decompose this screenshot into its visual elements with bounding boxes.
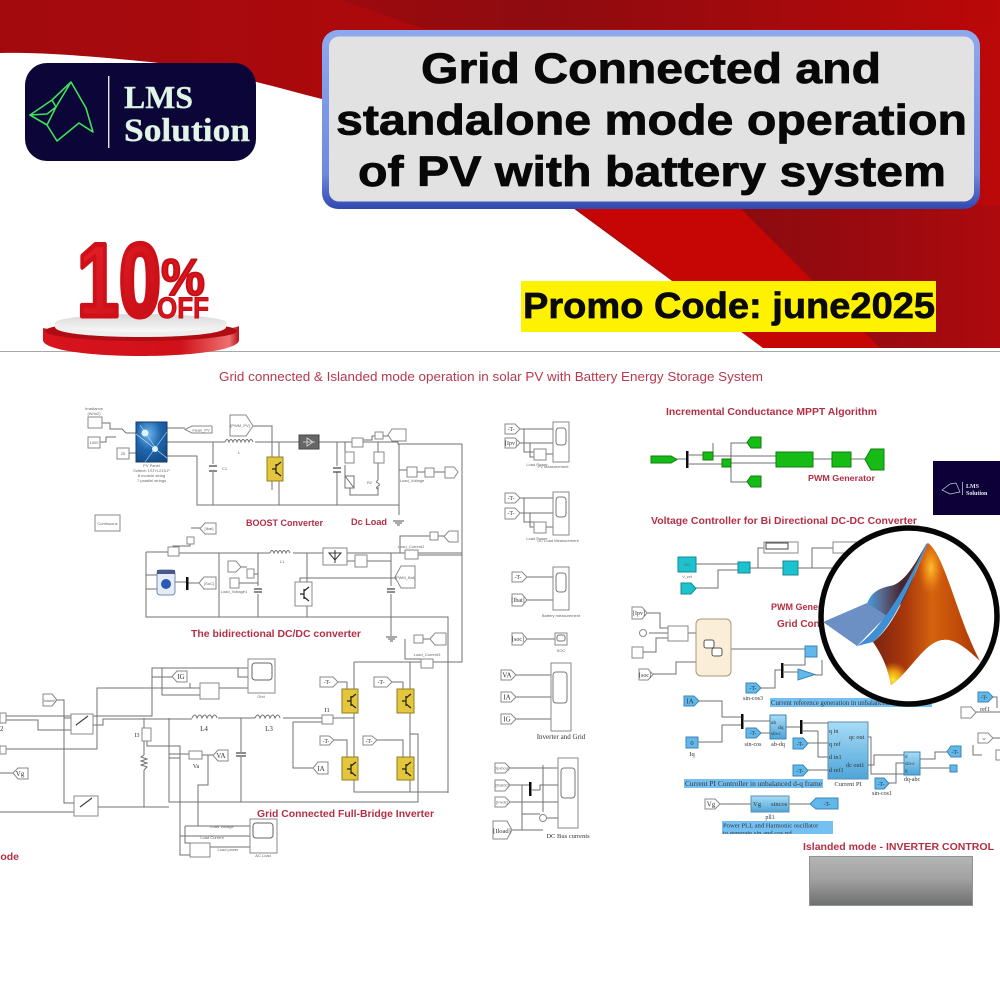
- grid connected inverter circuit: I1: [324, 707, 330, 714]
- mode selector and stateflow chart: [632, 607, 822, 688]
- blue plate: [823, 603, 887, 646]
- dq-abc block: [904, 752, 920, 775]
- load measurement scope: -T-: [507, 511, 515, 517]
- label: PWM generator: PWM Generator: [808, 473, 876, 483]
- current control blocks: Current PI Controller in unbalanced d-q frame: [685, 781, 822, 788]
- PV measurement scope: -T-: [507, 427, 515, 433]
- I1 measurement: [322, 715, 333, 724]
- off text: OFF: [157, 292, 209, 325]
- icon: matlab membrane outline: [30, 82, 93, 141]
- DC bus currents scope: [Ibatdc]: [495, 782, 509, 788]
- DC bus currents scope: [Ipvboo]: [495, 766, 509, 770]
- label: MPPT heading: Incremental Conductance MPPT Algorithm: [666, 406, 877, 418]
- AC load scope: [250, 819, 277, 853]
- ground: [386, 637, 397, 641]
- orange surface: [873, 543, 980, 685]
- discount badge: 10% off on podium: [43, 223, 239, 356]
- current control blocks: ab: [771, 720, 776, 726]
- label: voltage controller: Voltage Controller for Bi Directional DC-DC Converter: [651, 515, 917, 527]
- highlight: current PI: [684, 779, 823, 788]
- DC bus currents scope: [Invdc]: [496, 800, 508, 804]
- boost converter circuit: L: [238, 450, 241, 455]
- current control blocks: -T-: [796, 742, 804, 748]
- T goto tags: -T-: [323, 680, 331, 686]
- current control blocks: sin-cos: [744, 742, 762, 748]
- small brand logo: Solution: [966, 491, 988, 497]
- 10 numerals: 10: [77, 223, 161, 339]
- bidirectional converter circuit: Load_Voltage1: [221, 589, 248, 594]
- battery measurement scope: [Ibat]: [511, 598, 525, 604]
- current control blocks: -T-: [951, 750, 959, 756]
- SOC scope: [soc]: [512, 637, 524, 643]
- voltage controller blocks: 400: [684, 562, 691, 567]
- bidirectional converter circuit: [SoC]: [204, 581, 214, 586]
- upper switch: [323, 548, 347, 565]
- current control blocks: Current PI: [834, 781, 862, 788]
- SOC scope: SOC: [557, 648, 565, 653]
- grid connected inverter circuit: Grid: [257, 694, 265, 699]
- filter capacitor: [236, 753, 246, 756]
- T goto tags: -T-: [365, 739, 373, 745]
- boost converter circuit: (W/m2): [87, 411, 101, 416]
- small brand logo: LMS: [966, 484, 980, 490]
- inverter and grid scope: IA: [503, 694, 511, 702]
- surface highlights: [886, 545, 942, 685]
- grey subsystem block: [810, 856, 972, 906]
- current control blocks: -T-: [749, 731, 757, 737]
- logo wordmark: LMS: [124, 79, 193, 115]
- current control blocks: dq: [778, 725, 784, 731]
- PWM_PV tag: [230, 415, 253, 436]
- capacitors: [254, 589, 395, 592]
- boost converter circuit: R2: [367, 480, 373, 485]
- PV measurement scope: [505, 422, 569, 469]
- battery measurement scope: [511, 567, 581, 618]
- highlight: current reference: [770, 698, 932, 707]
- grid connected inverter circuit: IA: [317, 765, 325, 773]
- battery measurement scope: -T-: [514, 575, 522, 581]
- load current 3 branch: [405, 639, 430, 659]
- current control blocks: qc out: [849, 734, 865, 741]
- current control blocks: d ref1: [829, 767, 844, 774]
- inductor L1: [270, 550, 290, 553]
- bidirectional converter circuit: Load_Current2: [398, 544, 425, 549]
- current control blocks: Current reference generation in unbalanced d-q frame: [771, 700, 917, 707]
- mode selector and stateflow chart: [soc]: [639, 673, 651, 679]
- islanded control fragments at right edge: [961, 692, 1000, 760]
- voltage measure: [230, 578, 239, 588]
- full bridge switches: [342, 689, 414, 780]
- title text: Grid Connected and: [421, 45, 881, 93]
- DC bus currents scope: [Iload]: [493, 828, 511, 835]
- bidirectional converter circuit: [Ibat]: [205, 526, 213, 531]
- load measurement scope: DC Load Measurement: [537, 538, 580, 543]
- grid connected inverter circuit: Va: [193, 764, 199, 770]
- boost converter circuit: C1: [222, 466, 228, 471]
- grid connected inverter circuit: [0, 444, 462, 858]
- DC load branch: [352, 438, 363, 447]
- T goto tags: [320, 677, 392, 745]
- load voltage measurement: [407, 467, 417, 477]
- brand logo badge: [25, 63, 256, 161]
- grid connected inverter circuit: Load_Current3: [414, 652, 441, 657]
- current control blocks: 0: [690, 740, 694, 747]
- current control blocks: IA: [686, 698, 694, 706]
- current control blocks: -T-: [877, 782, 885, 788]
- load measurement scope: [505, 492, 580, 543]
- current control blocks: -T-: [823, 802, 831, 808]
- SOC scope: [512, 633, 567, 653]
- islanded control fragments at right edge: -T-: [980, 696, 988, 702]
- logo wordmark: [124, 79, 250, 149]
- label: boost converter: BOOST Converter: [246, 518, 323, 529]
- schematic heading: Grid connected & Islanded mode operation in solar PV with Battery Energy Storage System: [219, 369, 763, 384]
- boost switch: [267, 457, 283, 481]
- percent sign: %: [161, 249, 205, 307]
- inductors L4 and L3: [192, 715, 280, 718]
- PV measurement scope: PV Measurement: [538, 464, 569, 469]
- PV measurement scope: [Ipv]: [505, 441, 517, 447]
- DC bus currents scope: [493, 758, 590, 840]
- promo code banner: Promo Code: june2025: [523, 285, 935, 326]
- output switches: [0, 713, 6, 723]
- current control blocks: sin-cos1: [872, 791, 892, 797]
- ground: [393, 521, 404, 525]
- boost converter circuit: 1000: [90, 440, 99, 445]
- label: PWM generation clipped: PWM Generator: [771, 602, 839, 612]
- current control blocks: sin-c: [905, 762, 916, 767]
- boost converter circuit: [85, 406, 462, 525]
- title box: [322, 30, 980, 209]
- current control blocks: d: [905, 755, 908, 760]
- boost converter circuit: mean_PV: [192, 428, 210, 432]
- boost converter circuit: PV Panel: [143, 463, 160, 468]
- label: grid connected clipped: Grid Connected: [777, 619, 852, 630]
- current control blocks: -T-: [749, 686, 757, 692]
- current control blocks: Iq: [689, 751, 695, 758]
- load measurement scope: Load Power: [526, 536, 548, 541]
- label: full bridge inverter: Grid Connected Full-Bridge Inverter: [257, 808, 434, 820]
- islanded tag: [43, 694, 57, 706]
- current control blocks: pll1: [765, 815, 775, 821]
- bidirectional converter circuit: [146, 523, 462, 793]
- battery measurement scope: Battery measurement: [542, 613, 581, 618]
- label: islanded mode control: Islanded mode - INVERTER CONTROL: [803, 841, 995, 853]
- mode selector and stateflow chart: [Ipv]: [633, 611, 645, 617]
- grid connected inverter circuit: Vg: [16, 770, 25, 778]
- title text: [336, 45, 967, 196]
- grid connected inverter circuit: Load Voltage: [210, 824, 234, 829]
- continuous powergui block: [95, 515, 120, 531]
- load measurement scope: -T-: [507, 496, 515, 502]
- bidirectional converter circuit: L1: [280, 559, 285, 564]
- continuous powergui block: Continuous: [97, 521, 118, 526]
- inverter and grid scope: VA: [502, 672, 512, 680]
- current control blocks: dc out1: [846, 762, 864, 769]
- grid scope: [248, 659, 275, 693]
- mux bar: [186, 577, 188, 590]
- voltage controller blocks: V_ref: [682, 574, 693, 579]
- boost converter circuit: 25: [121, 451, 126, 456]
- boost converter circuit: Load_Voltage: [400, 478, 425, 483]
- current control blocks: Vg: [753, 801, 762, 808]
- boost converter circuit: 8 module string: [138, 473, 165, 478]
- islanded control fragments at right edge: ref1: [980, 706, 990, 713]
- T goto tags: -T-: [322, 739, 330, 745]
- grid connected inverter circuit: 2: [0, 725, 4, 733]
- title text: of PV with battery system: [358, 148, 946, 196]
- current control blocks: ab-dq: [771, 742, 785, 748]
- boost converter circuit: 7 parallel strings: [137, 478, 166, 483]
- current control blocks: q in: [829, 728, 838, 735]
- voltage controller blocks: [678, 542, 873, 594]
- Vg tag: [13, 768, 28, 779]
- highlight: power PLL: [722, 821, 833, 834]
- boost converter circuit: [PWM_PV]: [230, 423, 250, 428]
- tags: [746, 683, 761, 693]
- irradiance inputs: Irradiance: [85, 406, 104, 411]
- simulink schematic: [0, 369, 1000, 906]
- diode block: [299, 435, 319, 449]
- current control blocks: d in1: [829, 754, 842, 761]
- current control blocks: sin-c: [771, 732, 782, 737]
- background red swoosh: [0, 0, 1000, 348]
- highlight: power PLL: Power PLL and Harmonic oscillator: [723, 822, 819, 830]
- mean_PV tag: [185, 426, 212, 433]
- grid connected inverter circuit: IG: [177, 673, 185, 681]
- islanded control fragments at right edge: w: [983, 736, 986, 741]
- grid connected inverter circuit: L3: [265, 725, 273, 733]
- grid connected inverter circuit: [Island]: [43, 698, 55, 703]
- measurement scopes column: [493, 422, 590, 840]
- grid connected inverter circuit: I3: [134, 733, 140, 739]
- back hump: [867, 546, 925, 618]
- T goto tags: -T-: [377, 680, 385, 686]
- current control blocks: sincos: [771, 801, 788, 808]
- current control blocks: sin-cos3: [743, 696, 763, 702]
- PWM_Bat tag: [395, 566, 415, 588]
- bidirectional converter circuit: [PWM_Bat]: [395, 575, 415, 580]
- inverter and grid scope: [501, 663, 586, 741]
- current control blocks: [684, 683, 961, 837]
- DC bus currents scope: DC Bus currents: [546, 833, 590, 840]
- grid connected inverter circuit: AC Load: [255, 853, 271, 858]
- capacitor C2: [333, 468, 341, 472]
- capacitor C1: [209, 466, 217, 471]
- current PI block: [828, 722, 868, 779]
- current control blocks: q ref: [829, 741, 841, 748]
- label: dc load: Dc Load: [351, 517, 387, 528]
- PLL: [705, 799, 720, 809]
- grid connected inverter circuit: L4: [200, 725, 208, 733]
- stateflow block: [696, 619, 731, 676]
- logo wordmark: Solution: [124, 113, 250, 149]
- label: bidirectional converter: The bidirectional DC/DC converter: [191, 628, 361, 640]
- current control blocks: q: [905, 769, 908, 774]
- current control blocks: dq-abc: [904, 777, 920, 783]
- PV measurement scope: Load Power: [526, 462, 548, 467]
- inductor L: [225, 440, 253, 442]
- MPPT green blocks: [651, 437, 884, 487]
- boost converter circuit: Soltech 1STH-215-P: [133, 468, 170, 473]
- grid connected inverter circuit: Load power: [218, 847, 239, 852]
- grid connected inverter circuit: Load Current: [200, 835, 225, 840]
- I3 measurement and resistor: [142, 728, 151, 741]
- grid connected inverter circuit: VA: [216, 752, 226, 760]
- current control blocks: Vg: [707, 800, 716, 808]
- matlab logo in circle: [821, 528, 997, 704]
- title text: standalone mode operation: [336, 96, 967, 144]
- battery: [157, 570, 175, 595]
- small brand logo: [933, 461, 1000, 515]
- blue ridge stripe: [857, 543, 928, 646]
- inverter and grid scope: IG: [503, 716, 511, 724]
- lower switch: [295, 582, 312, 606]
- PV panel block: [136, 422, 167, 462]
- highlight: power PLL: to generate sin and cos ref: [723, 830, 793, 837]
- divider line above schematic: [0, 351, 1000, 352]
- Va measurement: [189, 751, 202, 759]
- inverter and grid scope: Inverter and Grid: [537, 733, 586, 741]
- current control blocks: -T-: [796, 769, 804, 775]
- load current measure: [405, 550, 418, 559]
